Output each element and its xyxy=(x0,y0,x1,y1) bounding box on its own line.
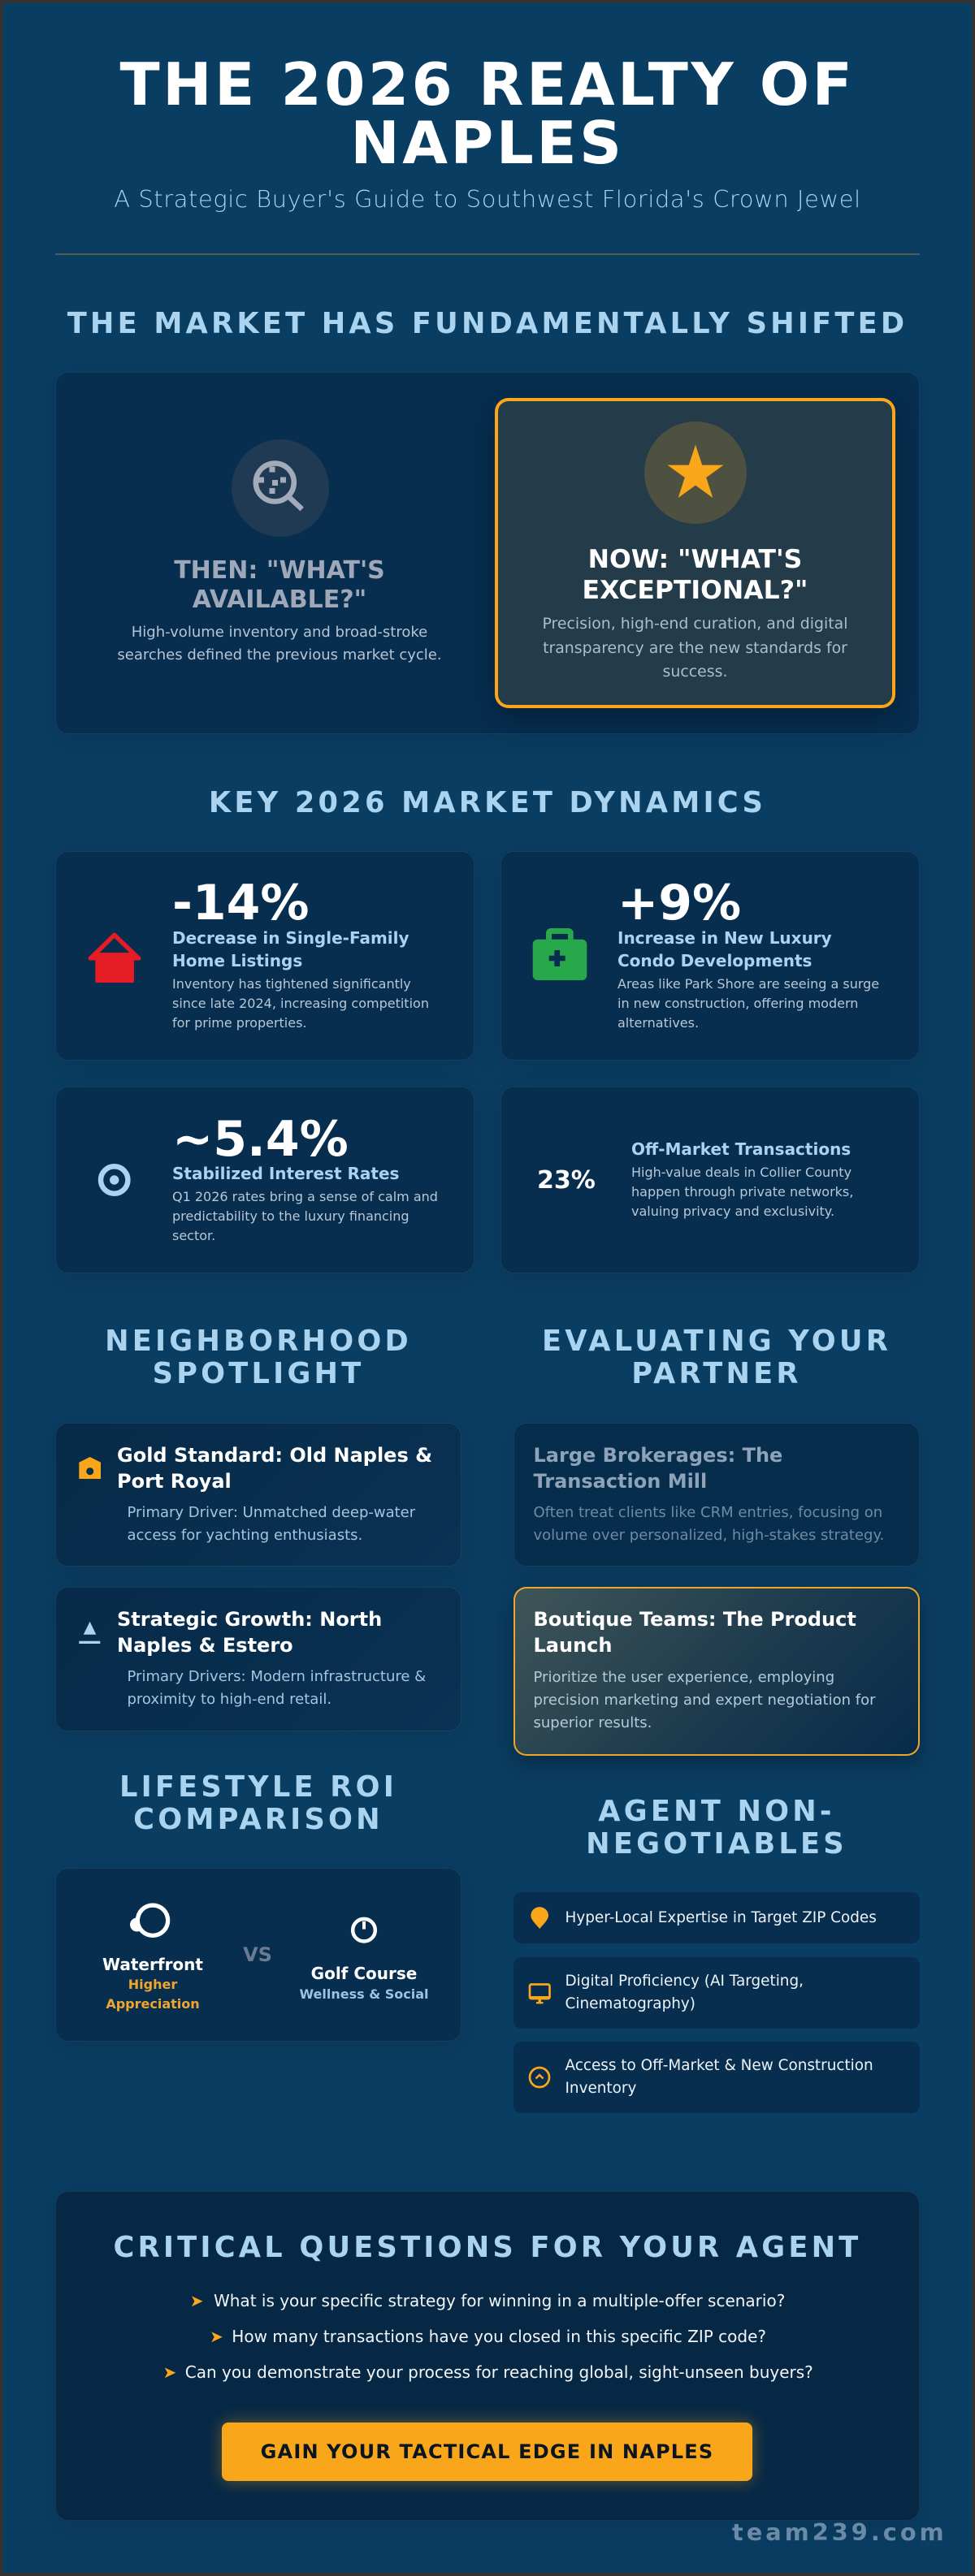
subtitle: A Strategic Buyer's Guide to Southwest Florida's Crown Jewel xyxy=(114,185,861,213)
heading: market shift: THE MARKET HAS FUNDAMENTALLY SHIFTED xyxy=(67,307,908,340)
stat label: Off-Market Transactions xyxy=(631,1139,851,1159)
stat description xyxy=(631,1165,853,1219)
panel: critical questions xyxy=(55,2191,920,2521)
stat description: sector. xyxy=(172,1228,215,1243)
card description: Often treat clients like CRM entries, focusing on xyxy=(533,1504,882,1521)
heading: agent non-negotiables: AGENT NON- xyxy=(598,1795,835,1827)
card description xyxy=(533,1504,884,1544)
stat description: Q1 2026 rates bring a sense of calm and xyxy=(172,1189,438,1204)
stat description xyxy=(172,976,429,1031)
heading: lifestyle roi: COMPARISON xyxy=(133,1803,384,1835)
heading: neighborhood spotlight: NEIGHBORHOOD xyxy=(105,1325,412,1358)
stat description: Inventory has tightened significantly xyxy=(172,976,411,992)
icon: gold house xyxy=(79,1457,101,1479)
waterfront benefit xyxy=(106,1977,200,2012)
stat label: Stabilized Interest Rates xyxy=(172,1163,399,1182)
card description: volume over personalized, high-stakes strategy. xyxy=(533,1527,884,1544)
stat description: in new construction, offering modern xyxy=(618,996,858,1011)
stat label xyxy=(618,927,832,970)
heading: agent non-negotiables: NEGOTIABLES xyxy=(586,1827,847,1860)
stat card: off-market xyxy=(500,1087,920,1273)
now description: transparency are the new standards for xyxy=(543,639,847,657)
stat description xyxy=(172,1189,438,1243)
vs label: VS xyxy=(243,1943,272,1966)
cta button: GAIN YOUR TACTICAL EDGE IN NAPLES xyxy=(261,2440,713,2463)
icon: sail xyxy=(79,1621,101,1644)
stat card: interest rates xyxy=(55,1087,474,1273)
now description xyxy=(542,615,848,681)
icon: star xyxy=(644,421,747,524)
item text: Cinematography) xyxy=(566,1995,696,2012)
card: boutique teams xyxy=(514,1587,920,1756)
card title: Naples & Estero xyxy=(117,1634,293,1657)
heading: neighborhood spotlight xyxy=(105,1325,412,1390)
icon: waterfront xyxy=(130,1903,171,1938)
card: old naples xyxy=(55,1423,462,1567)
question 1: ➤ xyxy=(190,2290,204,2310)
stat description: for prime properties. xyxy=(172,1015,307,1031)
waterfront benefit: Higher xyxy=(128,1977,177,1992)
heading: neighborhood spotlight: SPOTLIGHT xyxy=(153,1357,364,1390)
heading: market dynamics: KEY 2026 MARKET DYNAMICS xyxy=(209,786,766,819)
title: THE 2026 REALTY OF xyxy=(120,50,855,119)
stat card: listings xyxy=(55,851,474,1061)
card title: Large Brokerages: The xyxy=(533,1444,782,1467)
stat description: Areas like Park Shore are seeing a surge xyxy=(618,976,879,992)
question 2: ➤ xyxy=(210,2326,223,2345)
icon: golf xyxy=(351,1917,377,1943)
card title xyxy=(117,1444,432,1493)
question 1: What is your specific strategy for winning in a multiple-offer scenario? xyxy=(214,2290,785,2310)
item text: Inventory xyxy=(566,2080,636,2097)
waterfront label: Waterfront xyxy=(102,1954,203,1973)
panel: lifestyle comparison xyxy=(55,1868,462,2042)
card description: Primary Drivers: Modern infrastructure & xyxy=(127,1668,426,1685)
golf label: Golf Course xyxy=(311,1964,417,1983)
card description: precision marketing and expert negotiation for xyxy=(533,1692,876,1709)
list item: digital xyxy=(514,1957,920,2029)
stat description: High-value deals in Collier County xyxy=(631,1165,852,1180)
card title xyxy=(533,1608,856,1657)
card description: Primary Driver: Unmatched deep-water xyxy=(127,1504,415,1521)
card description xyxy=(127,1504,416,1544)
card title xyxy=(533,1444,782,1493)
list item: off-market access xyxy=(514,2042,920,2113)
then description: High-volume inventory and broad-stroke xyxy=(132,624,427,641)
heading: evaluating your partner: PARTNER xyxy=(631,1357,802,1390)
panel: then vs now xyxy=(55,372,920,734)
stat description: happen through private networks, xyxy=(631,1184,853,1199)
heading: evaluating your partner xyxy=(542,1325,891,1390)
stat number: ~5.4% xyxy=(172,1111,349,1168)
stat label xyxy=(172,927,410,970)
golf benefit: Wellness & Social xyxy=(299,1986,429,2002)
then heading xyxy=(174,556,385,614)
icon: monitor xyxy=(528,1983,551,2004)
stat label: Decrease in Single-Family xyxy=(172,927,410,947)
card: north naples xyxy=(55,1587,462,1731)
card description: superior results. xyxy=(533,1714,652,1731)
now heading: EXCEPTIONAL?" xyxy=(583,576,808,605)
heading: lifestyle roi xyxy=(119,1770,397,1835)
then description: searches defined the previous market cycle. xyxy=(117,646,442,663)
card title: Strategic Growth: North xyxy=(117,1608,382,1631)
icon: magnifier xyxy=(232,439,329,537)
question 2: How many transactions have you closed in this specific ZIP code? xyxy=(232,2326,766,2345)
card description: access for yachting enthusiasts. xyxy=(127,1527,362,1544)
card title xyxy=(117,1608,382,1657)
stat number: +9% xyxy=(618,875,741,931)
icon: pin xyxy=(531,1907,548,1929)
now heading xyxy=(583,545,808,605)
then heading: THEN: "WHAT'S xyxy=(174,556,385,585)
stat number: -14% xyxy=(172,875,310,931)
card description xyxy=(533,1669,876,1731)
item text: Hyper-Local Expertise in Target ZIP Codes xyxy=(566,1909,877,1926)
card description: proximity to high-end retail. xyxy=(127,1691,332,1708)
then heading: AVAILABLE?" xyxy=(193,586,366,614)
title xyxy=(120,50,855,177)
stat description: since late 2024, increasing competition xyxy=(172,996,429,1011)
heading: critical questions: CRITICAL QUESTIONS FOR YOUR AGENT xyxy=(114,2231,861,2264)
stat description: predictability to the luxury financing xyxy=(172,1208,410,1224)
stat card: condos xyxy=(500,851,920,1061)
stat number: 23% xyxy=(537,1166,596,1195)
card title: Gold Standard: Old Naples & xyxy=(117,1444,432,1467)
heading: evaluating your partner: EVALUATING YOUR xyxy=(542,1325,891,1358)
card title: Port Royal xyxy=(117,1470,232,1493)
question 3: Can you demonstrate your process for reaching global, sight-unseen buyers? xyxy=(185,2362,813,2382)
stat description: alternatives. xyxy=(618,1015,699,1031)
stat description: valuing privacy and exclusivity. xyxy=(631,1204,834,1219)
card description: Prioritize the user experience, employing xyxy=(533,1669,834,1686)
now description: Precision, high-end curation, and digital xyxy=(542,615,848,633)
stat description xyxy=(618,976,879,1031)
cta button xyxy=(222,2423,752,2481)
card: now xyxy=(495,398,895,708)
card title: Boutique Teams: The Product xyxy=(533,1608,856,1631)
now heading: NOW: "WHAT'S xyxy=(588,545,802,574)
item text xyxy=(566,2057,873,2097)
stat label: Home Listings xyxy=(172,951,302,970)
icon: target xyxy=(98,1164,131,1196)
card title: Transaction Mill xyxy=(533,1470,707,1493)
heading: agent non-negotiables xyxy=(586,1795,847,1860)
waterfront benefit: Appreciation xyxy=(106,1996,200,2012)
icon: chevron circle xyxy=(528,2066,551,2089)
icon: green case xyxy=(533,928,587,980)
now description: success. xyxy=(663,663,727,681)
card description xyxy=(127,1668,426,1708)
card title: Launch xyxy=(533,1634,612,1657)
item text xyxy=(566,1973,804,2012)
card: large brokerages xyxy=(514,1423,920,1567)
item text: Digital Proficiency (AI Targeting, xyxy=(566,1973,804,1990)
question 3: ➤ xyxy=(162,2362,176,2382)
title: NAPLES xyxy=(350,109,625,177)
watermark: team239.com xyxy=(732,2518,947,2546)
list item: hyper-local xyxy=(514,1892,920,1943)
icon: red house xyxy=(88,932,141,983)
heading: lifestyle roi: LIFESTYLE ROI xyxy=(119,1770,397,1803)
item text: Access to Off-Market & New Construction xyxy=(566,2057,873,2074)
then description xyxy=(117,624,442,663)
stat label: Increase in New Luxury xyxy=(618,927,832,947)
stat label: Condo Developments xyxy=(618,951,812,970)
